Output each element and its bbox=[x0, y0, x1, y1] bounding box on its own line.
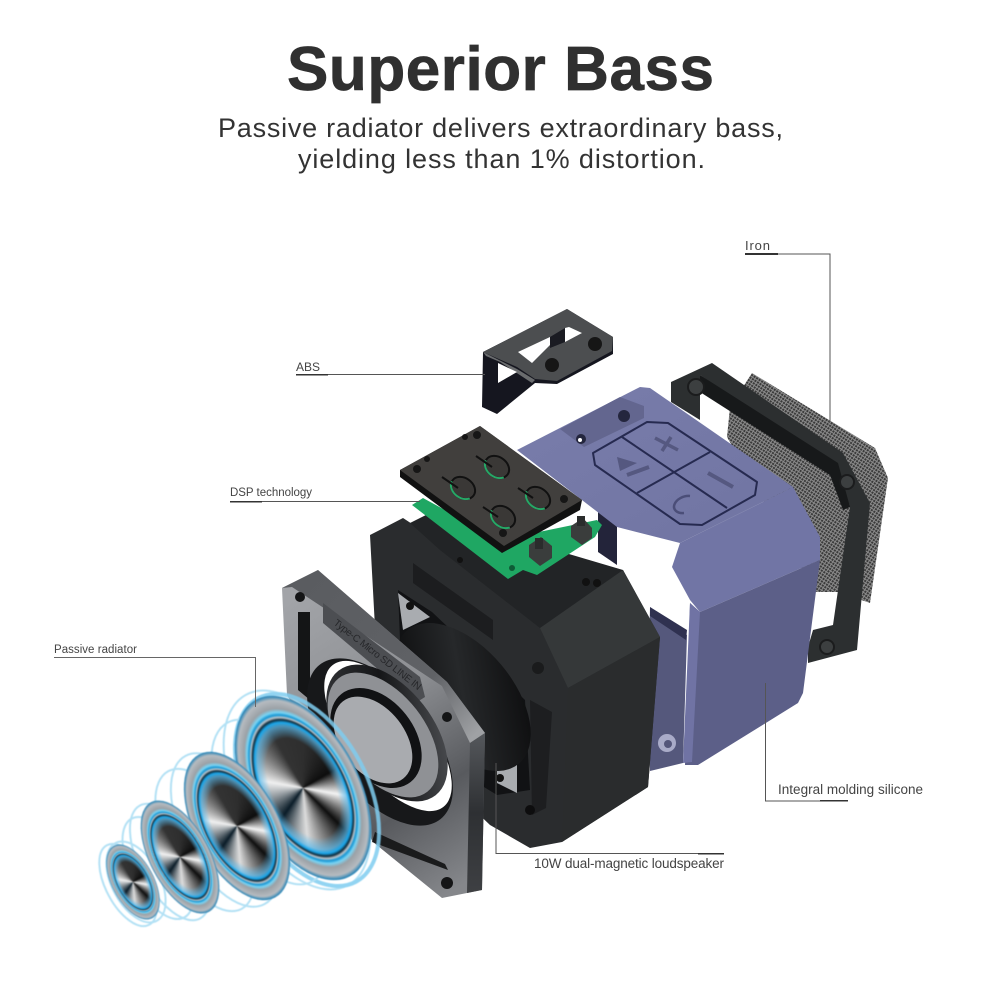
callout: 10W dual-magnetic loudspeaker bbox=[496, 763, 724, 871]
sound wave halos bbox=[87, 666, 409, 935]
disc 1 bbox=[95, 836, 171, 928]
callout: ABS: ABS bbox=[296, 360, 320, 374]
callout: 10W dual-magnetic loudspeaker: 10W dual-magnetic loudspeaker bbox=[534, 856, 724, 871]
title: Superior Bass bbox=[287, 35, 714, 104]
part: iron mesh and frame bbox=[671, 363, 888, 663]
callout: Iron: Iron bbox=[745, 238, 770, 253]
disc 2 bbox=[124, 788, 236, 926]
subtitle: yielding less than 1% distortion. bbox=[298, 144, 705, 174]
part: ABS bracket bbox=[482, 309, 613, 414]
disc 4 bbox=[207, 673, 399, 903]
callout: Integral molding silicone: Integral molding silicone bbox=[778, 782, 923, 797]
callout: DSP technology: DSP technology bbox=[230, 487, 312, 499]
part: DSP technology board bbox=[400, 426, 602, 579]
callout: Iron bbox=[745, 238, 830, 422]
callout: Passive radiator bbox=[54, 644, 256, 707]
keypad outline bbox=[593, 422, 757, 525]
callout: Passive radiator: Passive radiator bbox=[54, 644, 137, 656]
subtitle: Passive radiator delivers extraordinary bass, bbox=[218, 113, 783, 143]
disc 3 bbox=[162, 735, 312, 917]
part: front plate with passive radiator bbox=[279, 570, 485, 898]
port label strip: Type-C Micro SD LINE IN bbox=[331, 618, 423, 693]
part: black speaker housing bbox=[369, 513, 660, 848]
subtitle bbox=[218, 113, 783, 174]
port label strip bbox=[323, 603, 425, 702]
radiator hole and cone bbox=[279, 633, 481, 851]
callout: Integral molding silicone bbox=[766, 683, 923, 802]
part: integral molding silicone shell bbox=[517, 387, 820, 771]
